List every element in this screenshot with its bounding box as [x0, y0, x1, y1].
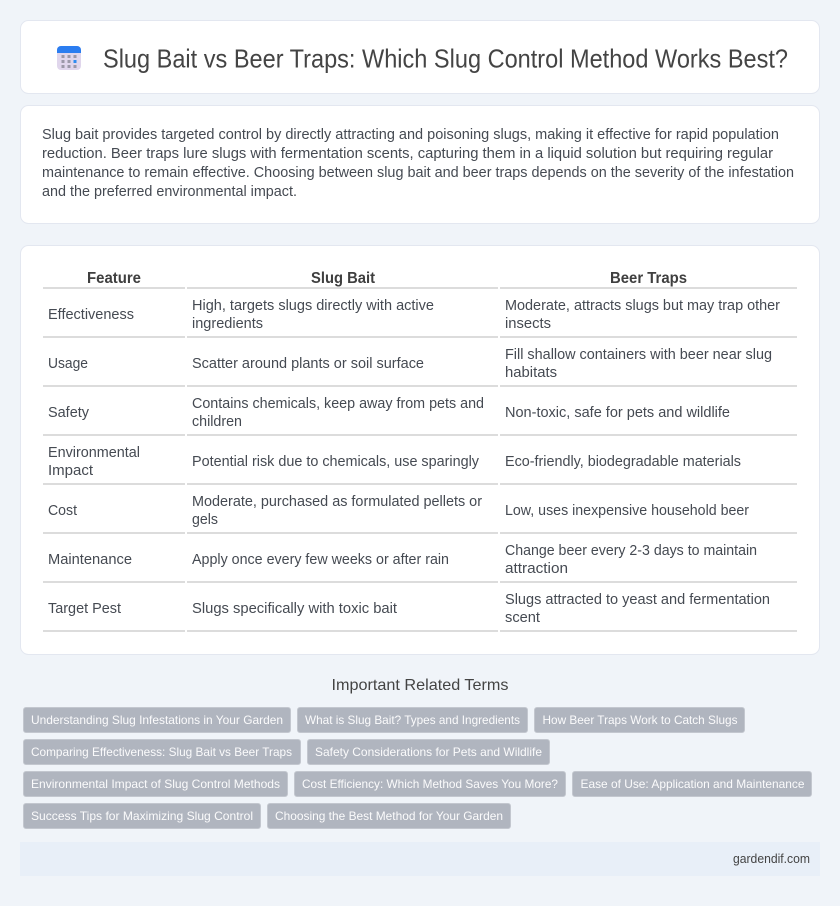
row: cost: Cost [48, 503, 77, 519]
row: effectiveness: ingredients [192, 316, 263, 332]
footer: gardendif.com [733, 852, 810, 866]
related term tags: How Beer Traps Work to Catch Slugs [542, 713, 738, 727]
table header: Beer Traps [610, 270, 687, 287]
heading: important related terms: Important Related Terms [332, 677, 508, 694]
row: target pest: scent [505, 610, 540, 626]
intro paragraph [42, 127, 794, 200]
row: usage: Scatter around plants or soil surface [192, 356, 424, 372]
row: safety: Safety [48, 405, 90, 421]
row: usage [48, 347, 772, 381]
row: environmental impact [48, 445, 741, 479]
related term tags: Environmental Impact of Slug Control Methods [31, 777, 280, 791]
row: usage: Fill shallow containers with beer near slug [505, 347, 772, 363]
intro paragraph: maintenance to remain effective. Choosing between slug bait and beer traps depends on the severity of the infestation [42, 165, 794, 181]
row: effectiveness: insects [505, 316, 551, 332]
row: target pest: Target Pest [48, 601, 121, 617]
row: cost: Low, uses inexpensive household beer [505, 503, 749, 519]
row: safety [48, 396, 730, 430]
row: target pest: Slugs specifically with toxic bait [192, 601, 397, 617]
row: maintenance [48, 543, 757, 577]
related term tags: Ease of Use: Application and Maintenance [580, 777, 805, 791]
intro paragraph: reduction. Beer traps lure slugs with fermentation scents, capturing them in a liquid solution but requiring regular [42, 146, 773, 162]
row: safety: Non-toxic, safe for pets and wildlife [505, 405, 730, 421]
row: effectiveness [48, 298, 780, 332]
table header: Slug Bait [311, 270, 375, 287]
row: environmental impact: Potential risk due to chemicals, use sparingly [192, 454, 480, 470]
row: environmental impact: Eco-friendly, biodegradable materials [505, 454, 741, 470]
related term tags: Safety Considerations for Pets and Wildlife [315, 745, 542, 759]
row: effectiveness: Effectiveness [48, 307, 134, 323]
related term tags: Cost Efficiency: Which Method Saves You More? [302, 777, 558, 791]
related term tags: Understanding Slug Infestations in Your Garden [31, 713, 283, 727]
row: usage: habitats [505, 365, 557, 381]
row: environmental impact: Environmental [48, 445, 140, 461]
intro paragraph: and the preferred environmental impact. [42, 184, 297, 200]
panel: header [20, 20, 820, 94]
related term tags: Comparing Effectiveness: Slug Bait vs Beer Traps [31, 745, 292, 759]
row: target pest: Slugs attracted to yeast and fermentation [505, 592, 770, 608]
row: maintenance: Change beer every 2-3 days to maintain [505, 543, 757, 559]
row: effectiveness: High, targets slugs directly with active [192, 298, 434, 314]
related term tags: Success Tips for Maximizing Slug Control [31, 809, 253, 823]
related term tags [24, 708, 812, 828]
title: Slug Bait vs Beer Traps: Which Slug Control Method Works Best? [103, 46, 788, 74]
footer [20, 842, 820, 876]
table header: Feature [87, 270, 141, 287]
row: cost: Moderate, purchased as formulated pellets or [192, 494, 482, 510]
row: maintenance: Maintenance [48, 552, 132, 568]
row: usage: Usage [48, 356, 88, 372]
row: maintenance: attraction [505, 561, 568, 577]
row: safety: children [192, 414, 242, 430]
icon: calendar [57, 46, 81, 70]
row: cost [48, 494, 749, 528]
row: cost: gels [192, 512, 218, 528]
panel: comparison table [20, 246, 820, 654]
table header [87, 270, 687, 287]
intro paragraph: Slug bait provides targeted control by directly attracting and poisoning slugs, making it effective for rapid population [42, 127, 779, 143]
row: maintenance: Apply once every few weeks or after rain [192, 552, 449, 568]
panel: intro text [20, 106, 820, 224]
row: target pest [48, 592, 770, 626]
related term tags: Choosing the Best Method for Your Garden [275, 809, 503, 823]
row: environmental impact: Impact [48, 463, 93, 479]
row: safety: Contains chemicals, keep away from pets and [192, 396, 484, 412]
row: effectiveness: Moderate, attracts slugs but may trap other [505, 298, 780, 314]
related term tags: What is Slug Bait? Types and Ingredients [305, 713, 520, 727]
